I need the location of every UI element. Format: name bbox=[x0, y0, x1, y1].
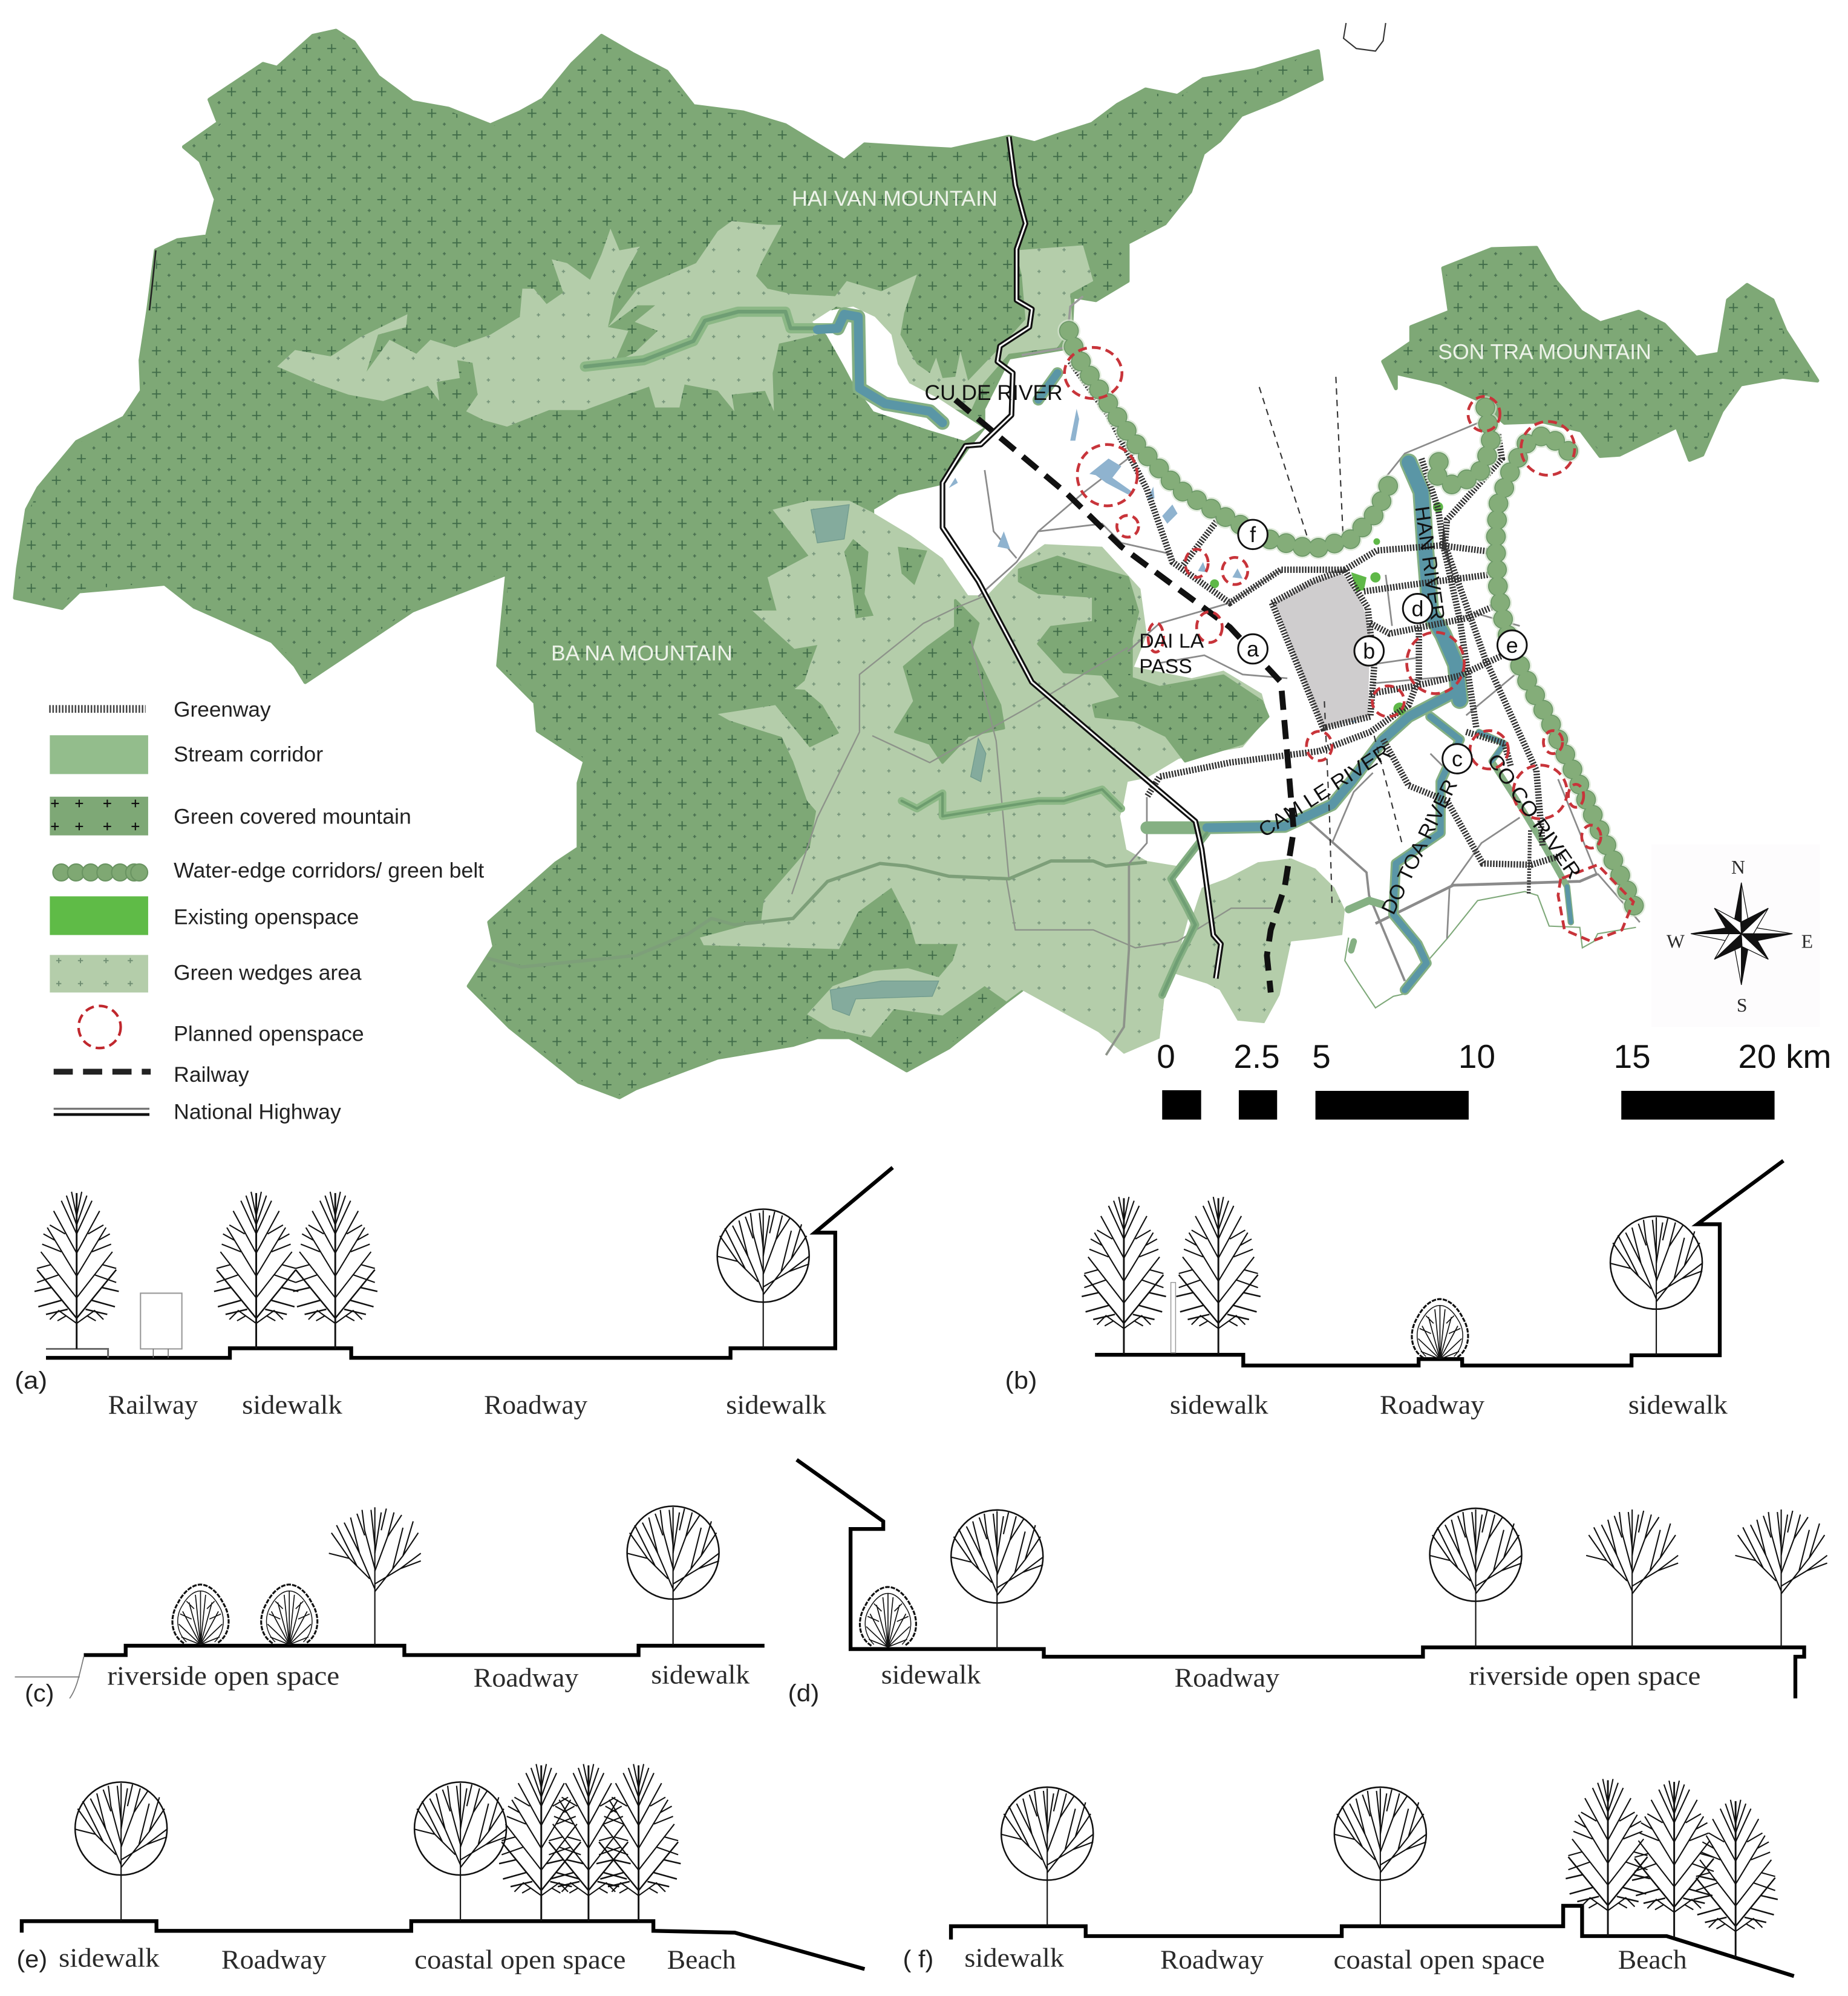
section marker f: f bbox=[1250, 523, 1256, 547]
section marker b: b bbox=[1363, 640, 1375, 664]
section c bbox=[15, 1506, 765, 1707]
scale bar: 0 bbox=[1157, 1038, 1175, 1075]
section d bbox=[788, 1460, 1827, 1707]
poplar trees a bbox=[34, 1192, 377, 1349]
labels c: riverside open space bbox=[107, 1660, 339, 1690]
inner dark mountain small bbox=[898, 547, 927, 585]
legend text: national highway: National Highway bbox=[174, 1100, 341, 1124]
section marker f bbox=[1238, 520, 1267, 549]
poplar trees f bbox=[1566, 1779, 1778, 1957]
labels d: Roadway bbox=[1175, 1662, 1279, 1692]
ground profile e bbox=[22, 1921, 864, 1969]
section marker c bbox=[1443, 744, 1472, 773]
green wedges: north bbox=[277, 221, 838, 427]
label (c): (c) bbox=[25, 1680, 54, 1707]
inner dark mountain lobes bbox=[844, 539, 873, 618]
labels e bbox=[59, 1942, 736, 1974]
legend swatch: greenway bbox=[49, 707, 146, 711]
labels b bbox=[1170, 1390, 1728, 1420]
green wedges: coastal south bbox=[1174, 859, 1345, 1023]
compass rose: N bbox=[1731, 857, 1745, 878]
riverbank bbox=[15, 1657, 84, 1698]
labels c bbox=[107, 1660, 750, 1692]
ground profile d bbox=[797, 1460, 1804, 1698]
legend swatch: national highway bbox=[54, 1109, 149, 1114]
greenways bbox=[1070, 361, 1561, 894]
panel: map bbox=[15, 23, 1817, 1098]
labels a: Roadway bbox=[484, 1390, 587, 1420]
labels f: Roadway bbox=[1160, 1944, 1264, 1974]
existing openspace patches bbox=[1210, 502, 1443, 715]
section marker a bbox=[1238, 634, 1267, 664]
legend swatch: green covered mountain bbox=[50, 797, 148, 836]
legend text: planned openspace: Planned openspace bbox=[174, 1023, 364, 1046]
round tree e1 bbox=[75, 1782, 167, 1921]
map label: Dai La Pass: PASS bbox=[1139, 655, 1192, 678]
national highway bbox=[942, 137, 1221, 978]
scale bar: 2.5 bbox=[1233, 1038, 1280, 1075]
round tree f2 bbox=[1334, 1787, 1426, 1926]
dark mountain islet in north wedge bbox=[608, 306, 658, 363]
section cut lines bbox=[1259, 377, 1402, 905]
round tree f1 bbox=[1001, 1787, 1093, 1926]
green covered mountain: Son Tra bbox=[1383, 248, 1817, 460]
planned openspace circles bbox=[1065, 347, 1633, 941]
labels b: sidewalk bbox=[1628, 1390, 1728, 1420]
white valley band bbox=[812, 307, 984, 440]
round tree b bbox=[1610, 1216, 1702, 1355]
legend text: green belt: Water-edge corridors/ green belt bbox=[174, 859, 485, 882]
urban roads bbox=[978, 422, 1640, 981]
section e bbox=[16, 1764, 864, 1974]
legend swatch: green wedges bbox=[50, 955, 148, 992]
labels a: Railway bbox=[108, 1390, 198, 1420]
round tree a bbox=[717, 1209, 809, 1348]
label (e): (e) bbox=[16, 1946, 47, 1972]
labels a bbox=[108, 1390, 827, 1420]
inner dark mountain west lobe bbox=[764, 687, 839, 747]
labels e: coastal open space bbox=[414, 1944, 626, 1974]
poplar trees b bbox=[1082, 1197, 1261, 1354]
shrubs c bbox=[172, 1585, 318, 1644]
green covered mountain: main bbox=[15, 31, 1322, 1098]
railway platform and sign bbox=[46, 1293, 182, 1358]
thin north coast boundary bbox=[1022, 296, 1083, 355]
legend swatch: existing openspace bbox=[50, 896, 148, 935]
map label: Cam Le River: CAM LE RIVER bbox=[1255, 740, 1394, 842]
compass rose: S bbox=[1737, 995, 1748, 1016]
labels f bbox=[964, 1942, 1687, 1974]
section marker e: e bbox=[1506, 633, 1518, 658]
labels f: coastal open space bbox=[1334, 1944, 1545, 1974]
ground profile a bbox=[46, 1168, 893, 1358]
section f bbox=[903, 1779, 1794, 1976]
scale bar: 15 bbox=[1614, 1038, 1651, 1075]
labels d bbox=[881, 1660, 1700, 1692]
legend text: existing openspace: Existing openspace bbox=[174, 905, 359, 929]
round tree e2 bbox=[414, 1782, 506, 1921]
labels f: Beach bbox=[1618, 1944, 1687, 1974]
legend text: green wedges: Green wedges area bbox=[174, 961, 362, 984]
railway bbox=[955, 400, 1294, 992]
section marker a: a bbox=[1247, 637, 1259, 661]
water bodies (lakes) bbox=[949, 409, 1364, 723]
labels d: riverside open space bbox=[1469, 1660, 1700, 1690]
bare tree c bbox=[329, 1507, 421, 1645]
sign b bbox=[1171, 1283, 1175, 1353]
labels e: Beach bbox=[667, 1944, 736, 1974]
labels b: Roadway bbox=[1380, 1390, 1484, 1420]
green wedges: east of Cu De bbox=[817, 245, 1093, 411]
coast edge bbox=[149, 250, 156, 310]
labels a: sidewalk bbox=[242, 1390, 343, 1420]
compass rose: W bbox=[1667, 931, 1685, 952]
labels d: sidewalk bbox=[881, 1660, 981, 1690]
section marker e bbox=[1497, 630, 1527, 659]
label (a): (a) bbox=[15, 1367, 47, 1394]
map label: Han River: HAN RIVER bbox=[1410, 505, 1449, 621]
mountain ridge stream bbox=[486, 861, 1147, 967]
map label: Son Tra Mountain: SON TRA MOUNTAIN bbox=[1438, 340, 1651, 364]
wedge lakes bbox=[811, 505, 986, 1015]
labels c: sidewalk bbox=[651, 1660, 750, 1690]
legend text: green covered mountain: Green covered mountain bbox=[174, 805, 411, 829]
section marker d bbox=[1403, 594, 1432, 623]
labels a: sidewalk bbox=[726, 1390, 827, 1420]
labels e: sidewalk bbox=[59, 1942, 160, 1972]
round tree c bbox=[627, 1506, 719, 1645]
map label: Co Co River: CO CO RIVER bbox=[1483, 750, 1585, 883]
compass rose bbox=[1651, 845, 1820, 1027]
legend text: railway: Railway bbox=[174, 1063, 249, 1087]
green wedges: south bbox=[700, 501, 1268, 1054]
map label: Hai Van Mountain: HAI VAN MOUNTAIN bbox=[792, 187, 997, 211]
map label: Do Toa River: DO TOA RIVER bbox=[1377, 776, 1462, 918]
ground profile f bbox=[951, 1906, 1794, 1976]
legend swatch: planned openspace bbox=[79, 1006, 121, 1048]
ground profile b bbox=[1095, 1160, 1783, 1366]
ground profile c bbox=[84, 1646, 765, 1655]
section marker c: c bbox=[1452, 747, 1463, 771]
section b bbox=[1005, 1160, 1783, 1420]
label (d): (d) bbox=[788, 1680, 819, 1707]
scale bar: 5 bbox=[1312, 1038, 1331, 1075]
shrub b bbox=[1412, 1299, 1468, 1359]
section a bbox=[15, 1168, 893, 1420]
round tree d2 bbox=[1430, 1508, 1522, 1648]
thin coast boundary bbox=[1345, 892, 1636, 1008]
labels c: Roadway bbox=[474, 1662, 578, 1692]
section marker d: d bbox=[1412, 597, 1423, 621]
water-edge corridors / green belt bbox=[1069, 331, 1640, 918]
legend text: stream corridor: Stream corridor bbox=[174, 742, 324, 766]
round tree d1 bbox=[951, 1510, 1043, 1649]
legend text: greenway: Greenway bbox=[174, 698, 271, 721]
inner dark mountain central bbox=[895, 600, 1004, 762]
rivers water bbox=[585, 312, 1571, 995]
section marker b bbox=[1354, 636, 1384, 666]
rivers edge bbox=[585, 312, 1571, 995]
wedge local roads bbox=[792, 597, 1273, 1055]
compass rose: E bbox=[1801, 931, 1813, 952]
legend bbox=[49, 698, 485, 1124]
labels e: Roadway bbox=[221, 1944, 327, 1974]
label (f): ( f) bbox=[903, 1946, 933, 1972]
map label: Cu De River: CU DE RIVER bbox=[925, 381, 1063, 405]
label (b): (b) bbox=[1005, 1367, 1037, 1394]
inner dark mountain east bbox=[1019, 557, 1268, 761]
scale bar: 20 km bbox=[1738, 1038, 1832, 1075]
legend swatch: green belt bbox=[53, 864, 148, 881]
harbour outline bbox=[1344, 23, 1386, 51]
scale bar bbox=[1157, 1038, 1832, 1119]
map label: Dai La Pass: DAI LA bbox=[1139, 629, 1204, 652]
shrub d bbox=[860, 1587, 916, 1647]
central urban area bbox=[1275, 574, 1370, 730]
poplar trees e bbox=[499, 1764, 681, 1921]
scale bar: 10 bbox=[1458, 1038, 1495, 1075]
labels b: sidewalk bbox=[1170, 1390, 1268, 1420]
legend swatch: stream corridor bbox=[50, 735, 148, 774]
bare trees d bbox=[1586, 1510, 1827, 1648]
map label: Ba Na Mountain: BA NA MOUNTAIN bbox=[551, 642, 733, 666]
legend swatch: railway bbox=[54, 1070, 151, 1073]
labels f: sidewalk bbox=[964, 1942, 1065, 1972]
